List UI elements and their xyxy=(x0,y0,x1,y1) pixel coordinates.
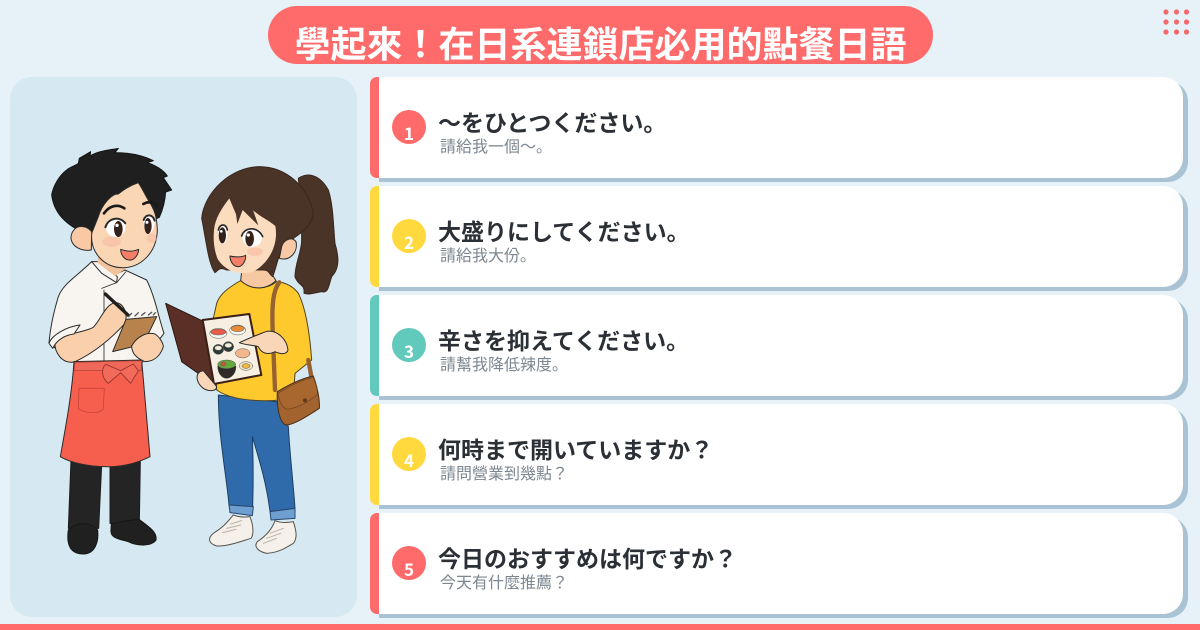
chef blush and mouth xyxy=(102,234,157,260)
customer figure xyxy=(166,167,338,553)
card accent bar xyxy=(370,295,380,396)
Chinese translation: 請問營業到幾點？ xyxy=(440,460,568,484)
face xyxy=(214,198,276,273)
card accent bar xyxy=(370,186,380,287)
chef shoes xyxy=(68,520,156,554)
Japanese phrase: 辛さを抑えてください。 xyxy=(438,322,689,356)
icon: decorative dot grid xyxy=(1163,9,1190,35)
phrase card 3 xyxy=(370,295,1188,400)
chef lower hand xyxy=(132,333,163,362)
apron bow xyxy=(103,364,138,383)
phrase card 4 xyxy=(370,404,1188,509)
shoulder bag xyxy=(277,376,319,425)
bottom accent bar xyxy=(0,624,1200,630)
ear xyxy=(279,239,296,259)
customer shoes xyxy=(209,515,296,553)
number badge 4 xyxy=(392,437,426,471)
card accent bar xyxy=(370,404,380,505)
chef arm, hand and pen xyxy=(55,303,126,362)
number badge 3 xyxy=(392,328,426,362)
chef ear xyxy=(71,226,92,250)
Chinese translation: 請給我大份。 xyxy=(440,242,536,266)
pointing hand xyxy=(239,331,288,354)
chef neck xyxy=(97,257,125,276)
card body xyxy=(379,404,1183,505)
notepad xyxy=(113,317,157,352)
apron pocket xyxy=(78,388,104,413)
Japanese phrase: 今日のおすすめは何ですか？ xyxy=(438,540,737,574)
card body xyxy=(379,295,1183,396)
card body xyxy=(379,513,1183,614)
card body xyxy=(379,77,1183,178)
card accent bar xyxy=(370,513,380,614)
Japanese phrase: 何時まで開いていますか？ xyxy=(438,431,713,465)
apron xyxy=(60,360,150,467)
Chinese translation: 請給我一個〜。 xyxy=(440,133,552,157)
mouth and blush xyxy=(230,247,263,267)
eyes xyxy=(218,225,263,247)
shirt xyxy=(213,280,312,401)
jeans xyxy=(218,395,295,512)
chef eyebrows xyxy=(104,202,157,213)
chef figure xyxy=(49,148,172,554)
chef shirt xyxy=(49,262,164,363)
ponytail xyxy=(295,175,338,294)
neck xyxy=(241,268,276,288)
number badge 1 xyxy=(392,110,426,144)
Chinese translation: 請幫我降低辣度。 xyxy=(440,351,568,375)
Chinese translation: 今天有什麼推薦？ xyxy=(440,569,568,593)
illustration: chef and customer with menu xyxy=(48,148,338,554)
card accent bar xyxy=(370,77,380,178)
menu food xyxy=(210,325,253,378)
menu page xyxy=(203,314,261,384)
jeans cuffs xyxy=(229,505,295,520)
chef face xyxy=(92,183,157,268)
hair xyxy=(202,167,313,277)
phrase card 1 xyxy=(370,77,1188,182)
number badge 2 xyxy=(392,219,426,253)
phrase card 2 xyxy=(370,186,1188,291)
Japanese phrase: 大盛りにしてください。 xyxy=(438,213,690,247)
card body xyxy=(379,186,1183,287)
chef eyes xyxy=(105,215,155,237)
bag strap xyxy=(272,282,312,390)
number badge 5 xyxy=(392,546,426,580)
chef hair xyxy=(52,148,172,237)
holding hand xyxy=(197,371,217,391)
bang strands xyxy=(233,193,258,225)
panel: illustration background xyxy=(10,77,357,617)
chef trousers xyxy=(68,460,140,528)
Japanese phrase: 〜をひとつください。 xyxy=(438,104,666,138)
phrase card 5 xyxy=(370,513,1188,618)
menu cover xyxy=(166,303,213,384)
